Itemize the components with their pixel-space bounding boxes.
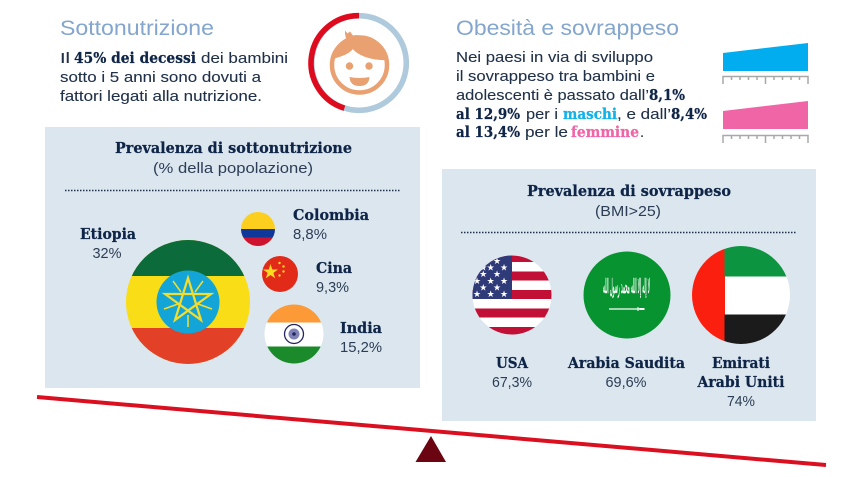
flag: USA: ★	[473, 277, 481, 287]
label: Cina: Cina	[316, 260, 353, 277]
flag: Emirati Arabi Uniti	[690, 245, 794, 346]
text block: decessi dei bambini: sotto i 5 anni sono dovuti a	[60, 69, 262, 86]
label: USA: USA	[496, 355, 529, 372]
panel: sovrappeso background	[442, 169, 816, 421]
text block: decessi dei bambini: 45% dei decessi	[74, 50, 196, 67]
flag: USA: ★	[479, 264, 487, 274]
flag: USA: ★	[500, 264, 508, 274]
text block: sovrappeso tra bambini e adolescenti: Nei paesi in via di sviluppo	[456, 49, 653, 66]
label: Colombia: 8,8%	[293, 226, 327, 243]
label: India	[340, 320, 383, 356]
flag: USA: ★	[479, 284, 487, 294]
label: India: India	[340, 320, 383, 337]
text block: sovrappeso tra bambini e adolescenti: al 13,4%	[456, 124, 520, 141]
text block: sovrappeso tra bambini e adolescenti: , e dall’	[617, 106, 671, 123]
label: Emirati Arabi Uniti: Arabi Uniti	[697, 374, 785, 391]
text block: sovrappeso tra bambini e adolescenti: maschi	[563, 106, 617, 123]
panel: sottonutrizione background	[45, 127, 420, 388]
heading: Prevalenza di sottonutrizione: Prevalenza di sottonutrizione	[115, 140, 352, 157]
heading: Sottonutrizione: Sottonutrizione	[60, 16, 214, 40]
heading: Prevalenza di sottonutrizione: (% della popolazione)	[153, 160, 313, 177]
text block: sovrappeso tra bambini e adolescenti: femmine	[571, 124, 639, 141]
label: USA: 67,3%	[492, 374, 532, 391]
heading: Prevalenza di sovrappeso: (BMI>25)	[595, 203, 661, 220]
text block: sovrappeso tra bambini e adolescenti: 8,1%	[649, 87, 685, 104]
flag: USA	[472, 255, 552, 336]
label: Etiopia: 32%	[92, 245, 122, 262]
label: Emirati Arabi Uniti	[697, 355, 785, 410]
heading: Prevalenza di sovrappeso: Prevalenza di sovrappeso	[527, 183, 731, 200]
flag: USA: ★	[479, 270, 487, 280]
text block: sovrappeso tra bambini e adolescenti: adolescenti è passato dall’	[456, 87, 649, 104]
text block: sovrappeso tra bambini e adolescenti: per le	[525, 124, 568, 141]
text block: sovrappeso tra bambini e adolescenti: per i	[526, 106, 558, 123]
heading: Prevalenza di sovrappeso	[527, 183, 731, 220]
label: Etiopia	[80, 226, 137, 262]
label: Colombia	[293, 207, 370, 243]
flag: USA: ★	[473, 290, 481, 300]
heading: Prevalenza di sottonutrizione	[115, 140, 352, 177]
text block: decessi dei bambini: dei bambini	[201, 50, 288, 67]
flag: USA: ★	[493, 257, 501, 267]
label: Emirati Arabi Uniti: Emirati	[712, 355, 770, 372]
heading: Obesità e sovrappeso: Obesità e sovrappeso	[456, 16, 679, 40]
flag: USA: ★	[500, 277, 508, 287]
flag: USA: ★	[487, 290, 495, 300]
icon: seesaw balance	[37, 397, 826, 465]
text block: decessi dei bambini	[60, 50, 288, 105]
flag: Colombia	[240, 212, 276, 246]
label: Emirati Arabi Uniti: 74%	[727, 393, 755, 410]
flag: USA: ★	[487, 264, 495, 274]
text block: sovrappeso tra bambini e adolescenti: 8,4%	[671, 106, 707, 123]
text block: sovrappeso tra bambini e adolescenti: il sovrappeso tra bambini e	[456, 68, 655, 85]
label: Arabia Saudita: Arabia Saudita	[567, 355, 686, 372]
flag: Etiopia	[126, 240, 250, 364]
chart: maschi area	[723, 43, 808, 84]
label: USA	[492, 355, 532, 391]
flag: USA: ★	[493, 284, 501, 294]
flag: Cina	[262, 256, 298, 292]
flag: USA: ★	[493, 270, 501, 280]
label: India: 15,2%	[340, 339, 382, 356]
label: Arabia Saudita: 69,6%	[606, 374, 646, 391]
flag: USA: ★	[487, 277, 495, 287]
label: Colombia: Colombia	[293, 207, 370, 224]
text block: sovrappeso tra bambini e adolescenti: .	[640, 124, 644, 141]
text: لا إله إلا الله محمد رسول الله	[603, 274, 650, 299]
text block: sovrappeso tra bambini e adolescenti	[456, 49, 707, 141]
text block: decessi dei bambini: fattori legati alla nutrizione.	[60, 88, 262, 105]
icon: 45% ring with child face	[311, 16, 406, 110]
label: Cina: 9,3%	[316, 279, 349, 296]
flag: USA: ★	[500, 290, 508, 300]
flag: India	[264, 304, 324, 364]
label: Etiopia: Etiopia	[80, 226, 137, 243]
label: Cina	[316, 260, 353, 296]
flag: Arabia Saudita	[584, 252, 670, 338]
text block: sovrappeso tra bambini e adolescenti: al 12,9%	[456, 106, 520, 123]
text block: decessi dei bambini: Il	[60, 50, 70, 67]
label: Arabia Saudita	[567, 355, 686, 391]
chart: femmine area	[723, 101, 808, 143]
